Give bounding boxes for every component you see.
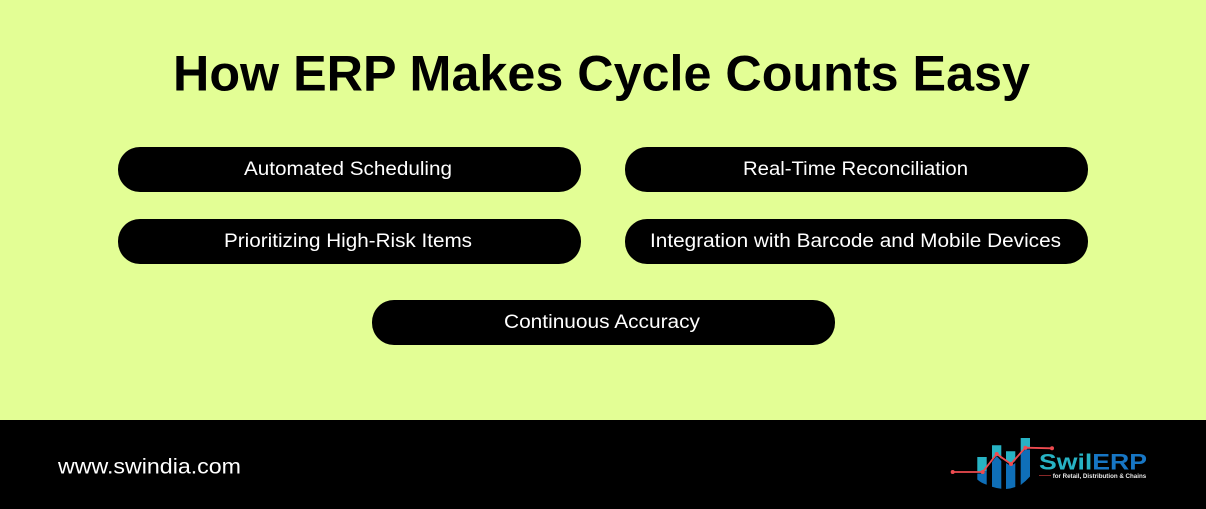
pill: Automated Scheduling	[118, 147, 581, 192]
pill: Prioritizing High-Risk Items: Prioritizing High-Risk Items	[224, 231, 472, 252]
pill: Integration with Barcode and Mobile Devices	[625, 219, 1088, 264]
logo wordmark: Swil ERP	[1039, 450, 1147, 474]
pill: Automated Scheduling: Automated Scheduling	[244, 159, 452, 180]
logo tagline: for Retail, Distribution & Chains	[1053, 473, 1147, 480]
footer band	[0, 420, 1206, 509]
pill: Integration with Barcode and Mobile Devices: Integration with Barcode and Mobile Devices	[650, 231, 1061, 252]
logo: SwilERP	[951, 438, 1147, 489]
pill: Continuous Accuracy: Continuous Accuracy	[504, 312, 701, 333]
pill: Prioritizing High-Risk Items	[118, 219, 581, 264]
pill: Real-Time Reconciliation: Real-Time Reconciliation	[743, 159, 968, 180]
title: How ERP Makes Cycle Counts Easy	[173, 44, 1030, 102]
logo trend line	[951, 446, 1054, 474]
pill: Real-Time Reconciliation	[625, 147, 1088, 192]
pill: Continuous Accuracy	[372, 300, 835, 345]
logo bars	[977, 438, 1030, 489]
website url: www.swindia.com	[57, 454, 241, 478]
